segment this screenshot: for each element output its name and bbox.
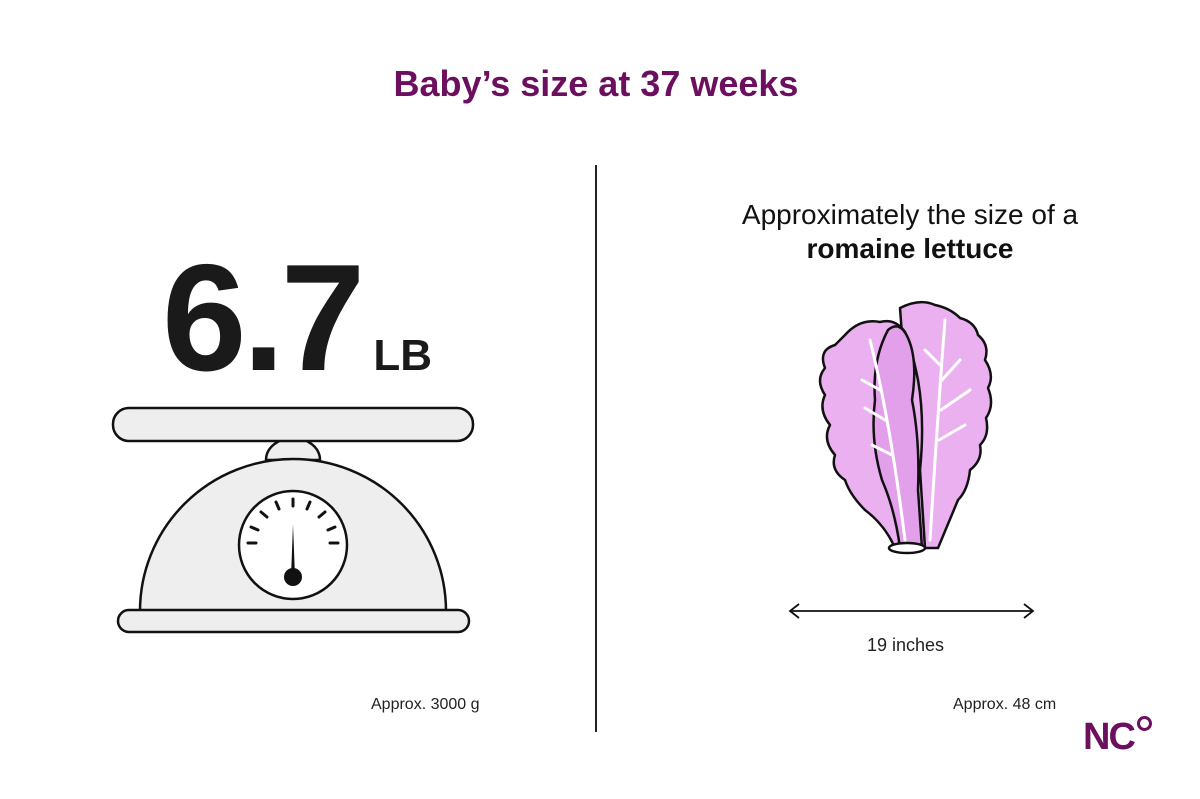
title: Baby’s size at 37 weeks xyxy=(394,63,798,104)
text: approx grams: Approx. 3000 g xyxy=(371,696,480,713)
logo: NC xyxy=(1083,716,1134,758)
arrow: width xyxy=(788,603,1034,619)
text: inches: 19 inches xyxy=(867,635,944,655)
divider xyxy=(595,165,597,732)
comparison text xyxy=(742,199,1078,264)
comparison text: romaine lettuce xyxy=(807,233,1013,264)
text: approx cm: Approx. 48 cm xyxy=(953,696,1056,713)
icon: scale xyxy=(112,406,474,634)
comparison text: Approximately the size of a xyxy=(742,199,1078,230)
weight number: 6.7 LB xyxy=(162,233,432,403)
icon: lettuce xyxy=(818,300,992,554)
